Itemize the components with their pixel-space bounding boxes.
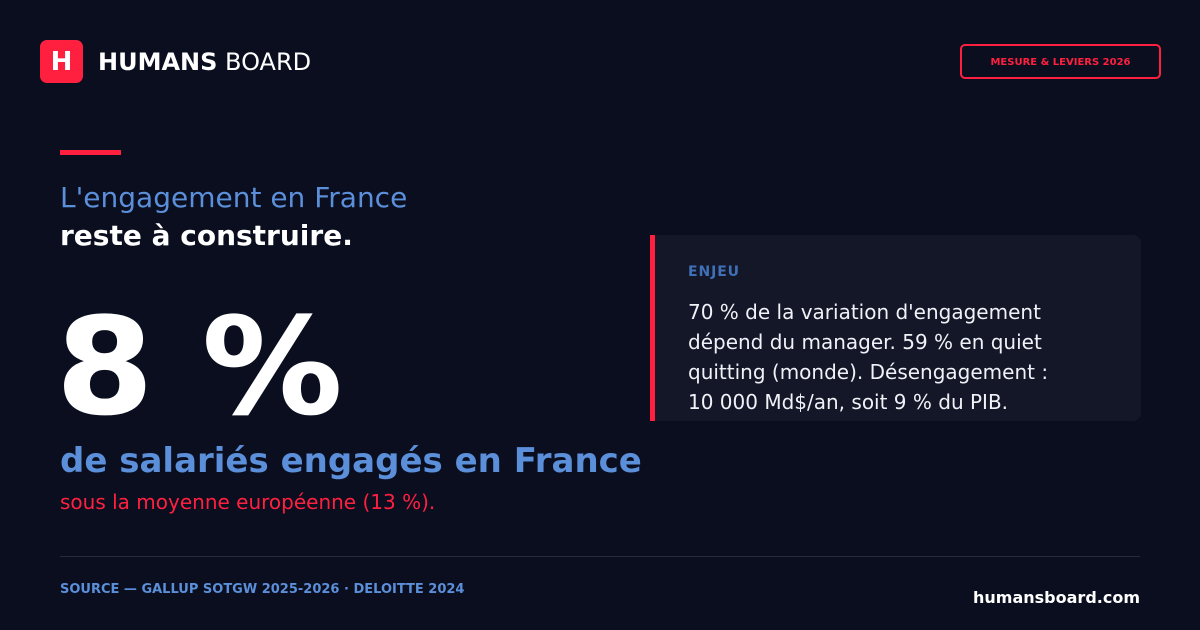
- heading line 1: L'engagement en France: [60, 181, 407, 214]
- panel text: dépend du manager. 59 % en quiet: [688, 330, 1042, 354]
- source: SOURCE — GALLUP SOTGW 2025-2026 · DELOITTE 2024: [60, 582, 464, 597]
- icon: H badge: H: [51, 47, 72, 77]
- panel text: 10 000 Md$/an, soit 9 % du PIB.: [688, 390, 1008, 414]
- footer divider: [60, 556, 1140, 557]
- panel text: 70 % de la variation d'engagement: [688, 300, 1041, 324]
- panel label: ENJEU: [688, 264, 740, 280]
- key figure label: de salariés engagés en France: [60, 441, 642, 481]
- big number: 8 %: [56, 290, 342, 446]
- logo: [40, 40, 311, 83]
- icon: H badge: [40, 40, 83, 83]
- heading: [60, 181, 407, 252]
- key figure note: sous la moyenne européenne (13 %).: [60, 490, 435, 514]
- website: humansboard.com: [973, 588, 1140, 607]
- panel text: [688, 300, 1048, 414]
- heading line 2: reste à construire.: [60, 219, 353, 252]
- panel accent bar: [650, 235, 655, 421]
- panel: enjeu: [650, 235, 1141, 421]
- badge: mesure et leviers: [960, 44, 1161, 79]
- accent bar: [60, 150, 121, 155]
- badge: mesure et leviers: MESURE & LEVIERS 2026: [990, 57, 1131, 68]
- brand name: HUMANS BOARD: [98, 48, 311, 76]
- panel text: quitting (monde). Désengagement :: [688, 360, 1048, 384]
